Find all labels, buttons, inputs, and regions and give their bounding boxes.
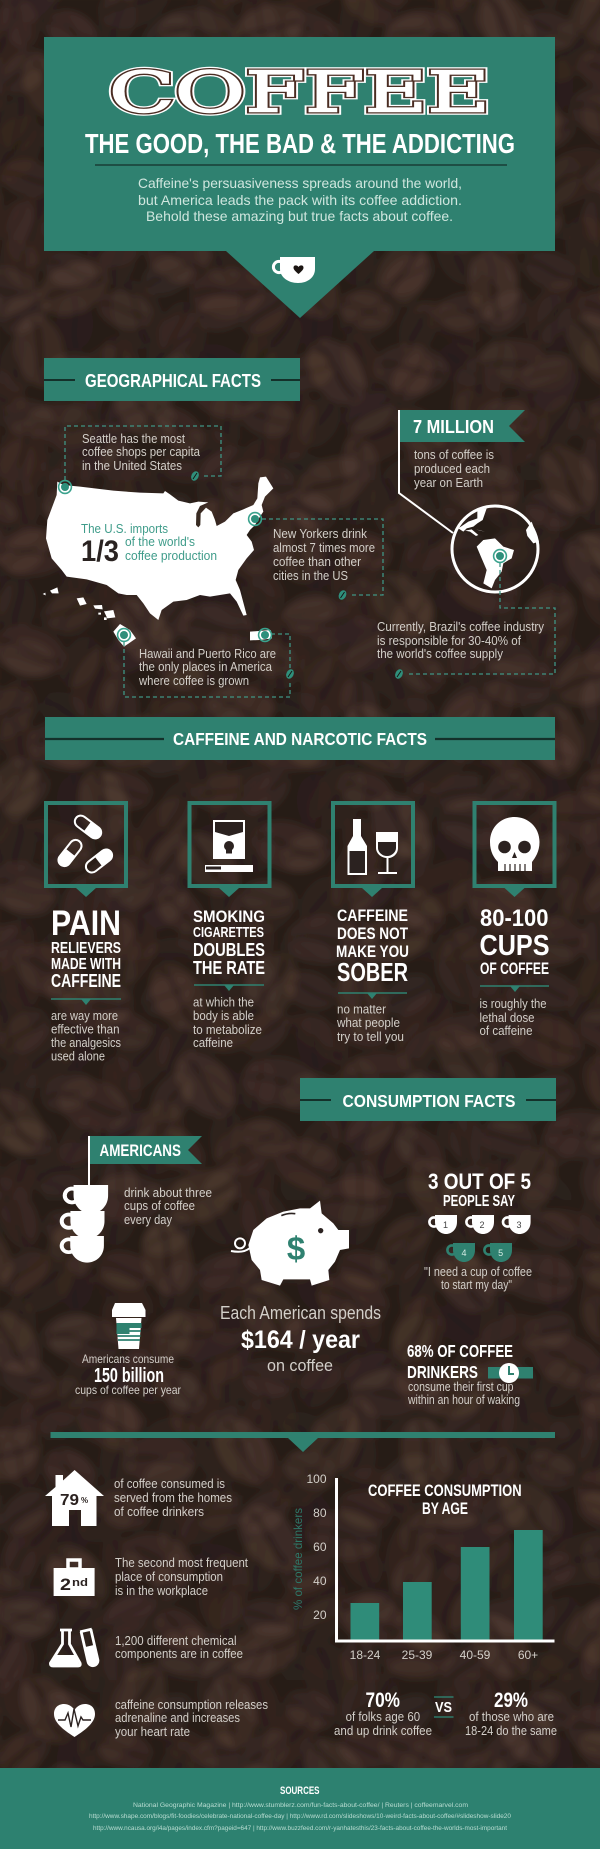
panel: piggy bank spend: on coffee: [267, 1356, 333, 1375]
map text: US imports: of the world's: [125, 534, 195, 549]
panel: 150 billion cups: 150 billion: [94, 1365, 164, 1387]
panel: 68 percent: DRINKERS: [407, 1362, 478, 1382]
callout: 7 million flag: produced each: [414, 462, 490, 476]
icon: house: %: [81, 1496, 88, 1505]
fact: workplace: The second most frequent: [115, 1556, 248, 1570]
x axis labels: [350, 1648, 538, 1662]
fact: heart rate: [54, 1698, 268, 1739]
panel: sources footer: http://www.shape.com/blogs/fit-foodies/celebrate-national-coffee-day | http://www.rd.com/slideshows/10-weird-facts-about-coffee/#slideshow-slide20: [89, 1813, 511, 1820]
fact: home: of coffee consumed is: [114, 1477, 225, 1491]
panel: Americans three cups: every day: [124, 1213, 173, 1227]
panel: Americans three cups: drink about three: [124, 1186, 212, 1200]
y axis labels: 80: [313, 1506, 327, 1520]
callout: Hawaii and Puerto Rico: Hawaii and Puerto Rico are: [139, 647, 276, 661]
bar chart: coffee consumption by age: BY AGE: [422, 1499, 468, 1518]
panel: smoking: [190, 803, 270, 1050]
map text: US imports: coffee production: [125, 548, 217, 563]
panel: smoking: body is able: [193, 1009, 254, 1023]
panel: lethal dose: [474, 803, 554, 1038]
panel: lethal dose: 80-100: [480, 905, 548, 932]
heading: geographical facts: GEOGRAPHICAL FACTS: [85, 370, 261, 391]
panel: alcohol: MAKE YOU: [336, 942, 409, 961]
panel: piggy bank spend: Each American spends: [220, 1303, 381, 1323]
title: COFFEE: [109, 60, 490, 126]
panel: lethal dose: is roughly the: [480, 997, 547, 1011]
icon: house: 79: [60, 1492, 79, 1509]
panel: 68 percent: consume their first cup: [408, 1380, 514, 1394]
panel: piggy bank spend: $164 / year: [241, 1326, 360, 1354]
panel: smoking: to metabolize: [193, 1023, 262, 1037]
y axis title: % of coffee drinkers: [291, 1508, 305, 1610]
comparison: 70 vs 29: [334, 1689, 557, 1738]
y axis labels: 40: [313, 1574, 327, 1588]
callout: Brazil: [377, 563, 555, 680]
panel: lethal dose: of caffeine: [480, 1024, 533, 1038]
fact: heart rate: your heart rate: [115, 1725, 190, 1739]
comparison: 70 vs 29: 29%: [494, 1689, 528, 1712]
panel: smoking: THE RATE: [193, 958, 265, 978]
callout: Brazil: Currently, Brazil's coffee industry: [377, 620, 545, 634]
y axis labels: 60: [313, 1540, 327, 1554]
panel: 3 out of 5: "I need a cup of coffee: [424, 1265, 532, 1279]
fact: home: [45, 1470, 232, 1526]
callout: 7 million flag: tons of coffee is: [414, 448, 494, 462]
fact: chemicals: [50, 1629, 243, 1667]
icon: globe: [452, 506, 539, 592]
icon: heart: [54, 1704, 95, 1737]
heading: consumption facts: [300, 1078, 556, 1121]
panel: 3 out of 5: [424, 1169, 532, 1292]
callout: 7 million flag: 7 MILLION: [413, 416, 494, 437]
icon: five cups: [429, 1215, 531, 1262]
panel: 150 billion cups: Americans consume: [82, 1352, 174, 1366]
map text: US imports: The U.S. imports: [81, 521, 168, 536]
panel: Americans three cups: AMERICANS: [100, 1142, 181, 1160]
icon: coffee cup with heart: [273, 257, 315, 283]
intro text: Caffeine's persuasiveness spreads around the world,: [138, 175, 462, 191]
callout: Seattle: coffee shops per capita: [82, 445, 200, 459]
panel: pain relievers: RELIEVERS: [51, 940, 121, 957]
icon: skull: [490, 817, 540, 871]
icon: pills: [56, 813, 115, 875]
panel: alcohol: no matter: [337, 1003, 386, 1017]
panel: alcohol: SOBER: [337, 957, 408, 987]
icon: cigarettes: [205, 820, 253, 872]
x axis labels: 60+: [518, 1648, 538, 1662]
y axis labels: 100: [306, 1472, 327, 1486]
map text: US imports: [81, 521, 217, 568]
callout: New York: [249, 513, 383, 601]
panel: pain relievers: are way more: [51, 1009, 118, 1023]
icon: clock band: [488, 1363, 533, 1383]
comparison: 70 vs 29: of those who are: [469, 1709, 554, 1724]
heading: caffeine and narcotic facts: [45, 717, 555, 760]
panel: lethal dose: lethal dose: [480, 1011, 535, 1025]
callout: New York: almost 7 times more: [273, 541, 375, 555]
panel: lethal dose: CUPS: [480, 930, 550, 962]
panel: 3 out of 5: 3 OUT OF 5: [428, 1169, 531, 1194]
title: COFFEE: COFFEE: [109, 60, 490, 126]
panel: 150 billion cups: [75, 1303, 181, 1397]
y axis labels: [306, 1472, 327, 1622]
panel: alcohol: CAFFEINE: [337, 906, 408, 925]
bar chart: coffee consumption by age: COFFEE CONSUMPTION: [368, 1481, 522, 1500]
icon: five cups: 2: [479, 1220, 485, 1230]
panel: pain relievers: MADE WITH: [51, 956, 121, 973]
icon: five cups: 5: [498, 1248, 503, 1258]
callout: Hawaii and Puerto Rico: [118, 629, 295, 697]
callout: Seattle: in the United States: [82, 459, 182, 473]
panel: smoking: at which the: [193, 996, 254, 1010]
title: COFFEE: COFFEE: [109, 60, 490, 126]
fact: home: of coffee drinkers: [114, 1505, 204, 1519]
title: COFFEE: COFFEE: [109, 60, 490, 126]
icon: briefcase: [54, 1560, 95, 1596]
panel: 68 percent: 68% OF COFFEE: [407, 1341, 513, 1361]
bar chart: coffee consumption by age: [291, 1472, 554, 1662]
x axis labels: 40-59: [460, 1648, 491, 1662]
panel: alcohol: what people: [336, 1016, 400, 1030]
x axis labels: 25-39: [402, 1648, 433, 1662]
panel: alcohol: try to tell you: [337, 1030, 404, 1044]
fact: home: served from the homes: [114, 1491, 232, 1505]
fact: heart rate: caffeine consumption releases: [115, 1698, 268, 1712]
panel: pain relievers: effective than: [51, 1023, 120, 1037]
x axis labels: 18-24: [350, 1648, 381, 1662]
panel: lethal dose: OF COFFEE: [480, 960, 549, 978]
panel: pain relievers: PAIN: [51, 904, 121, 943]
panel: pain relievers: CAFFEINE: [51, 971, 121, 991]
icon: house: [45, 1470, 104, 1526]
fact: workplace: place of consumption: [115, 1570, 223, 1584]
icon: briefcase: nd: [72, 1577, 88, 1589]
icon: five cups: 4: [461, 1248, 467, 1258]
callout: Seattle: [65, 426, 221, 487]
fact: heart rate: adrenaline and increases: [115, 1711, 240, 1725]
comparison: 70 vs 29: VS: [435, 1699, 452, 1716]
y axis labels: 20: [313, 1608, 327, 1622]
intro text: [138, 175, 462, 224]
heading: consumption facts: CONSUMPTION FACTS: [342, 1091, 516, 1111]
panel: smoking: caffeine: [193, 1036, 233, 1050]
panel: alcohol: DOES NOT: [337, 924, 408, 943]
callout: 7 million flag: [399, 410, 525, 533]
intro text: Behold these amazing but true facts about coffee.: [146, 208, 453, 224]
callout: Hawaii and Puerto Rico: the only places in America: [139, 660, 272, 674]
panel: 68 percent: within an hour of waking: [407, 1393, 520, 1407]
intro text: but America leads the pack with its coffee addiction.: [138, 192, 462, 208]
icon: five cups: 1: [443, 1220, 448, 1230]
panel: sources footer: http://www.ncausa.org/i4a/pages/index.cfm?pageid=647 | http://www.buzzfeed.com/r-yanhatesthis/23-facts-about-coffee-the-worlds-most-important: [93, 1825, 507, 1832]
callout: Hawaii and Puerto Rico: where coffee is grown: [138, 674, 249, 688]
icon: five cups: 3: [516, 1220, 522, 1230]
icon: stacked cups: [62, 1185, 108, 1263]
icon: briefcase: 2: [60, 1575, 71, 1594]
callout: Brazil: the world's coffee supply: [377, 647, 504, 661]
panel: pain relievers: the analgesics: [51, 1036, 121, 1050]
map text: US imports: 1/3: [81, 535, 119, 568]
panel: alcohol: [333, 803, 413, 1044]
comparison: 70 vs 29: of folks age 60: [346, 1709, 420, 1724]
panel: 150 billion cups: cups of coffee per year: [75, 1383, 181, 1397]
Seattle map marker: [59, 481, 71, 493]
heading: geographical facts: [44, 358, 300, 401]
callout: New York: coffee than other: [273, 555, 361, 569]
icon: bottle and wine glass: [348, 819, 398, 875]
icon: to-go cup: [112, 1303, 146, 1349]
fact: workplace: is in the workplace: [115, 1584, 208, 1598]
icon: flask and test tube: [50, 1629, 100, 1667]
panel: 3 out of 5: PEOPLE SAY: [443, 1193, 515, 1210]
panel: sources footer: SOURCES: [280, 1785, 320, 1797]
fact: chemicals: 1,200 different chemical: [115, 1634, 236, 1648]
icon: piggy bank: [231, 1201, 349, 1286]
panel: Americans three cups: [62, 1136, 212, 1263]
fact: workplace: [54, 1556, 248, 1598]
icon: piggy bank: $: [287, 1230, 305, 1267]
panel: sources footer: National Geographic Magazine | http://www.stumblerz.com/fun-facts-about-coffee/ | Reuters | coffeemarvel.com: [133, 1802, 468, 1809]
panel: header: [44, 37, 555, 318]
panel: pain relievers: used alone: [51, 1050, 105, 1064]
panel: 3 out of 5: to start my day": [441, 1278, 512, 1292]
heading: caffeine and narcotic facts: CAFFEINE AND NARCOTIC FACTS: [173, 729, 427, 749]
fact: chemicals: components are in coffee: [115, 1647, 243, 1661]
comparison: 70 vs 29: 18-24 do the same: [465, 1723, 557, 1738]
divider with arrow: [50, 1432, 555, 1452]
panel: smoking: DOUBLES: [193, 940, 265, 960]
panel: smoking: SMOKING: [193, 907, 265, 926]
callout: New York: New Yorkers drink: [273, 527, 368, 541]
callout: Seattle: Seattle has the most: [82, 432, 185, 446]
bars: [350, 1530, 543, 1640]
map: United States: [43, 477, 273, 647]
comparison: 70 vs 29: and up drink coffee: [334, 1723, 432, 1738]
callout: Brazil: is responsible for 30-40% of: [377, 634, 521, 648]
panel: pain relievers: [46, 803, 126, 1064]
comparison: 70 vs 29: 70%: [366, 1689, 400, 1712]
callout: 7 million flag: year on Earth: [414, 476, 483, 490]
panel: sources footer: [0, 1768, 600, 1849]
panel: 68 percent: [407, 1341, 533, 1407]
panel: smoking: CIGARETTES: [193, 924, 264, 941]
panel: Americans three cups: cups of coffee: [124, 1199, 195, 1213]
callout: New York: cities in the US: [273, 569, 348, 583]
panel: piggy bank spend: [220, 1201, 381, 1375]
